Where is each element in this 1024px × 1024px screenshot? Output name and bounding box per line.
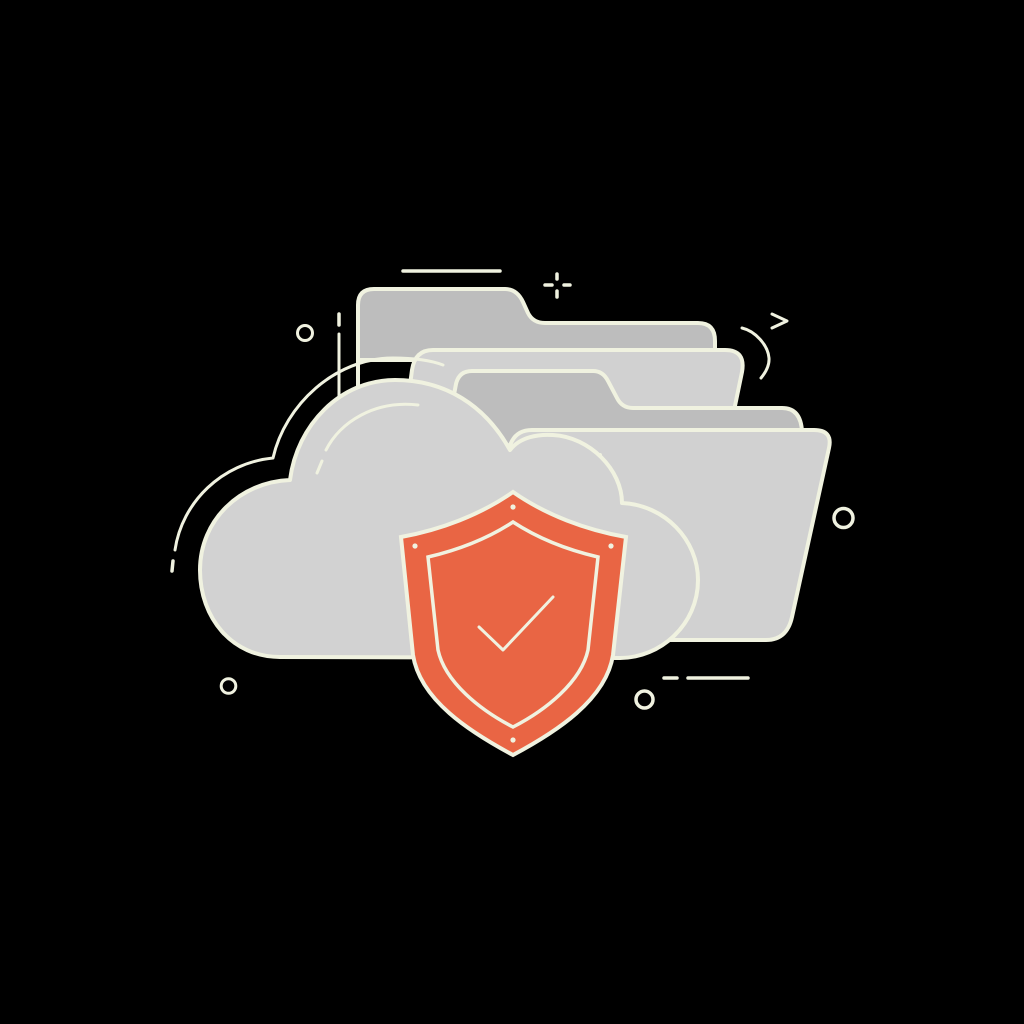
check mark bbox=[479, 597, 553, 650]
small circle bottom bbox=[636, 691, 653, 708]
icon: shield with check mark bbox=[401, 492, 626, 755]
bottom accent dashes bbox=[664, 676, 748, 680]
icon: chevron bbox=[772, 314, 787, 328]
icon: sparkle bbox=[545, 274, 570, 297]
outer cloud outline arc bbox=[172, 358, 443, 571]
icon: back folder two bbox=[453, 371, 802, 450]
small circle right bbox=[834, 508, 853, 528]
top accent line bbox=[403, 269, 500, 273]
cloud highlight dash bbox=[317, 461, 322, 473]
vertical accent lines bbox=[337, 314, 341, 398]
shield inner border bbox=[428, 522, 598, 727]
shield rivets bbox=[412, 504, 614, 743]
icon: cloud bbox=[200, 380, 698, 658]
icon: front folder one bbox=[408, 350, 743, 430]
shield body bbox=[401, 492, 626, 755]
small circle bottom left bbox=[221, 679, 236, 693]
cloud highlight arc bbox=[326, 404, 418, 450]
small circle top left bbox=[298, 326, 312, 340]
icon: front folder two bbox=[505, 430, 830, 640]
motion arc bbox=[742, 328, 769, 378]
icon: back folder one bbox=[358, 289, 715, 420]
